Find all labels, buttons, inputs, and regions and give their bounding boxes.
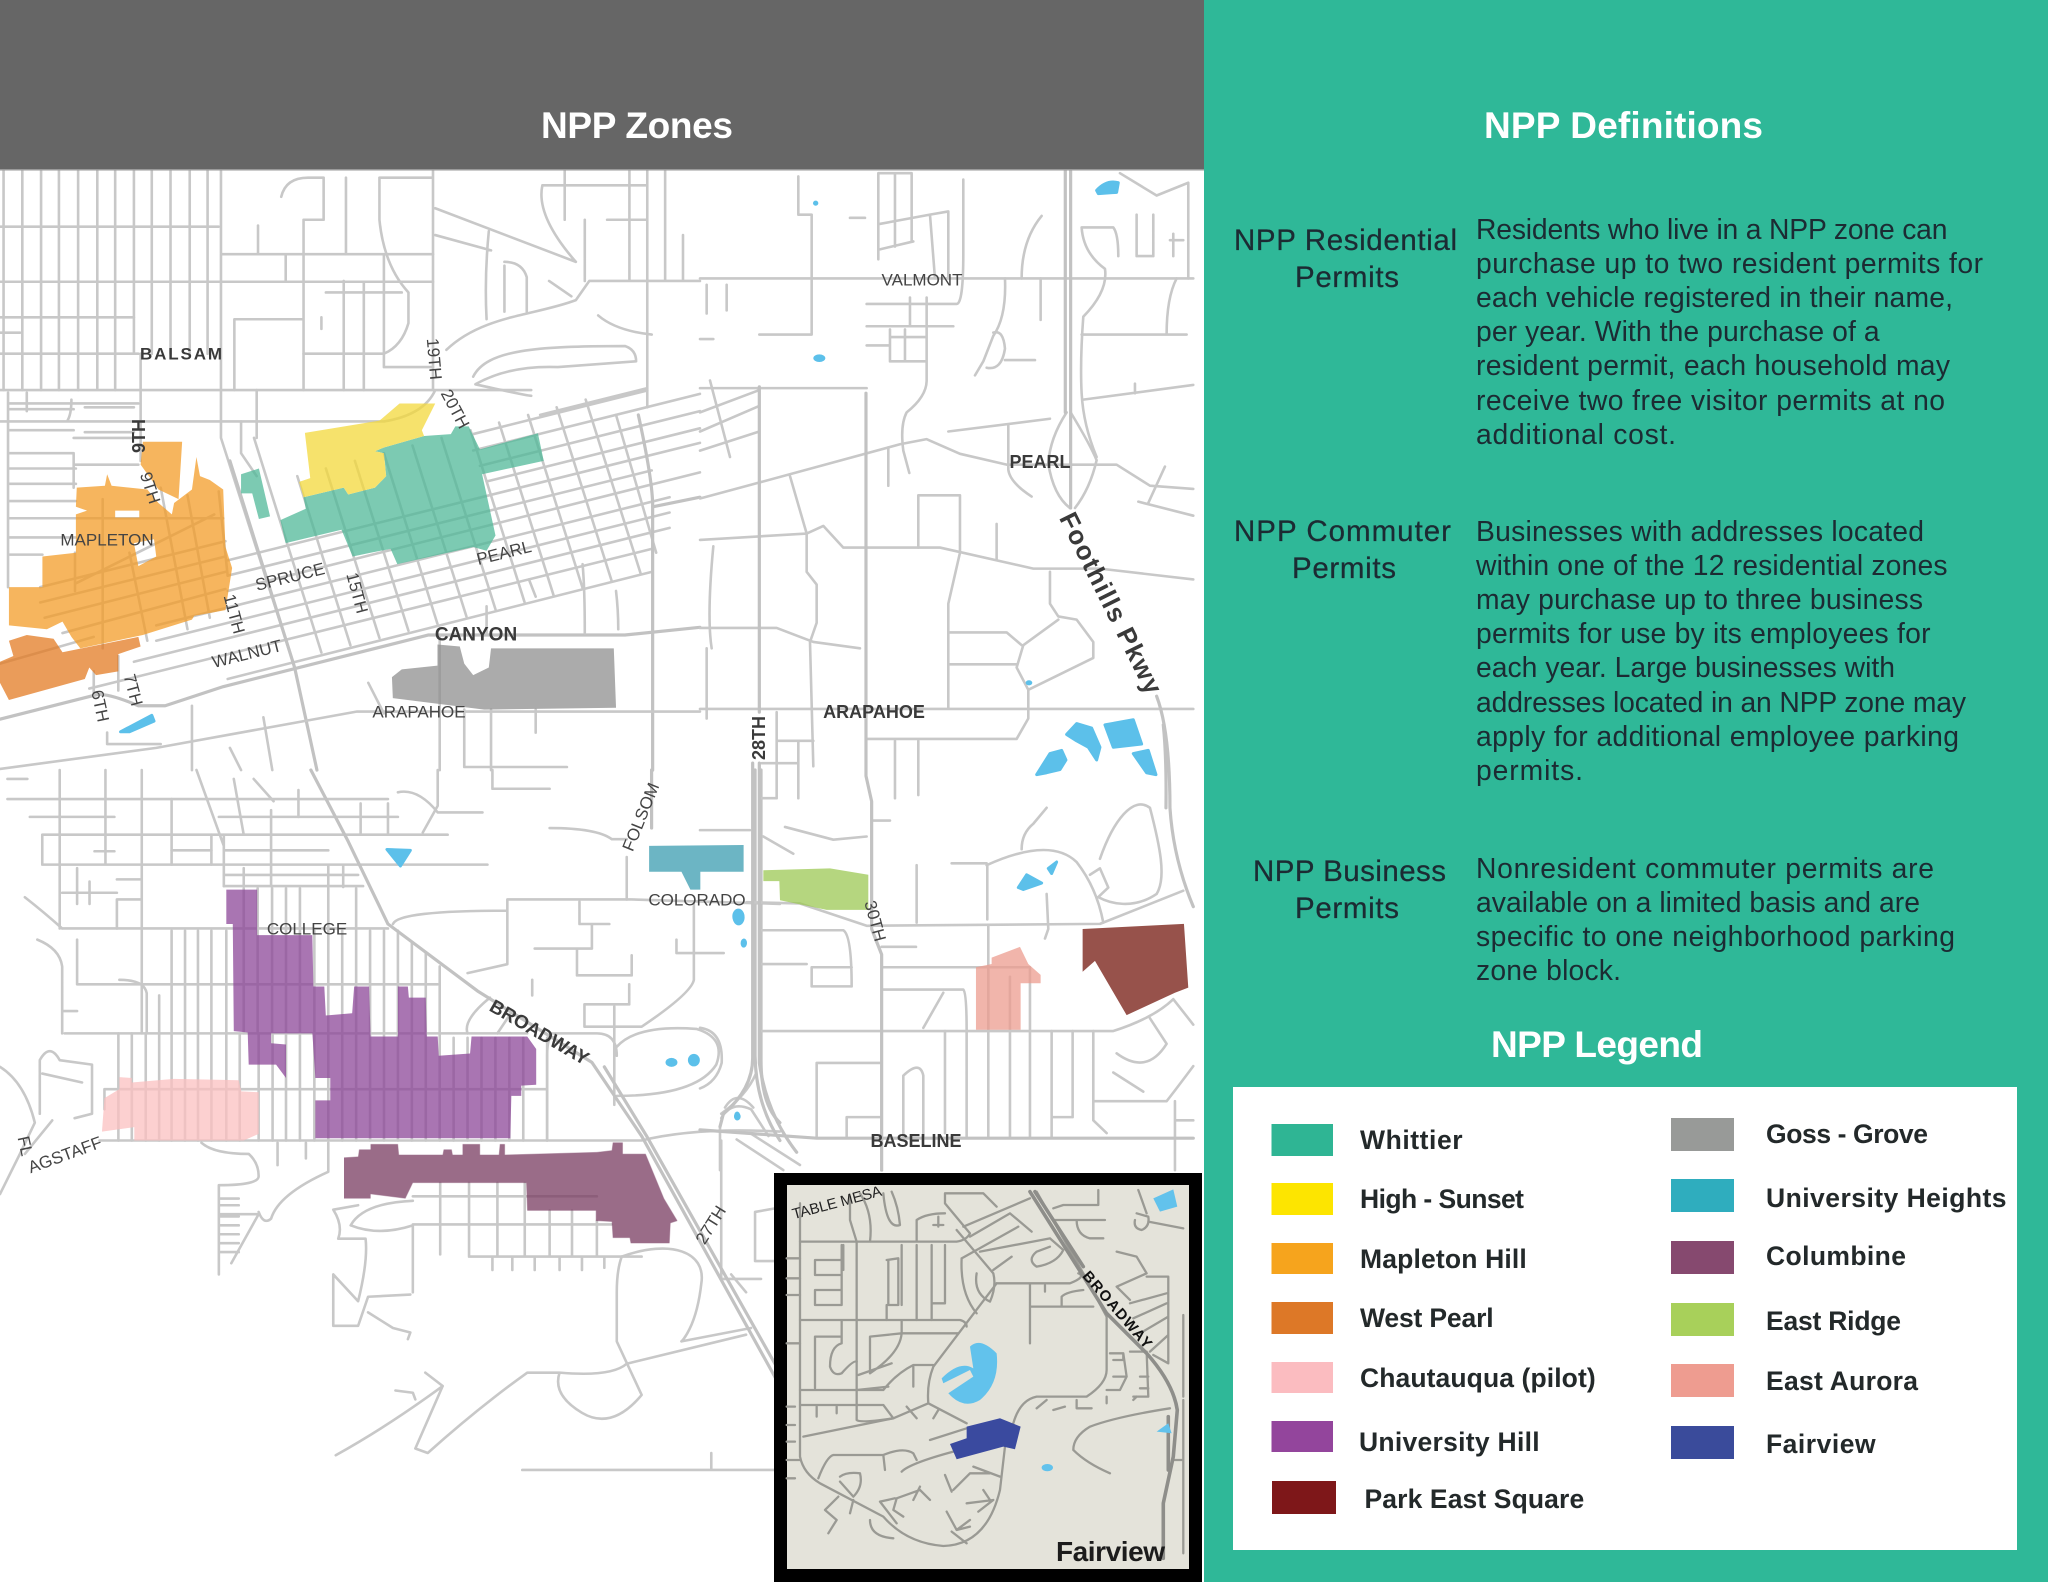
- label: 27th: 27TH: [692, 1202, 730, 1248]
- inset label: Broadway: BROADWAY: [1079, 1268, 1155, 1352]
- label: 7th: 7TH: [120, 672, 146, 708]
- definition: residential: purchase up to two resident permits for: [1476, 247, 1983, 279]
- zone: Whittier: [241, 426, 544, 564]
- label: 9th: 9TH: [136, 470, 164, 506]
- label: 11th: 11TH: [220, 592, 248, 636]
- term: NPP Residential Permits: NPP Residential: [1234, 224, 1457, 257]
- label: 9th bold: 9TH: [129, 419, 149, 453]
- heading: NPP Definitions: NPP Definitions: [1484, 105, 1763, 146]
- label: 6th: 6TH: [87, 688, 113, 724]
- label: Pearl west: PEARL: [475, 537, 533, 569]
- label: Balsam: BALSAM: [140, 344, 222, 364]
- legend: Mapleton Hill: Mapleton Hill: [1360, 1244, 1527, 1274]
- legend: Chautauqua: Chautauqua (pilot): [1360, 1363, 1596, 1393]
- definition: commuter: [1475, 515, 1967, 786]
- definition: commuter: each year. Large businesses with: [1476, 651, 1895, 683]
- zone: Goss-Grove: [392, 645, 616, 710]
- definition: residential: resident permit, each household may: [1476, 349, 1951, 381]
- label: Colorado: COLORADO: [648, 890, 746, 910]
- inset frame: [774, 1173, 1202, 1582]
- label: College: COLLEGE: [267, 920, 347, 938]
- zone: University Hill: [226, 890, 536, 1138]
- label: Foothills Parkway: Foothills Pkwy: [1053, 507, 1169, 699]
- roads: southwest quadrant: [0, 770, 780, 1470]
- legend: High-Sunset: [1272, 1183, 1524, 1215]
- legend: Fairview: Fairview: [1766, 1429, 1876, 1459]
- definition: business: zone block.: [1476, 954, 1621, 986]
- ponds: south: [387, 849, 747, 1120]
- legend: East Aurora: [1671, 1364, 1918, 1397]
- inset ponds: [942, 1189, 1177, 1471]
- label: Flagstaff: AGSTAFF: [26, 1133, 104, 1177]
- zone: Chautauqua: [102, 1077, 259, 1141]
- zone: West Pearl: [0, 635, 141, 700]
- map panel: road network: [0, 170, 1193, 1470]
- legend: Park East Square: Park East Square: [1364, 1484, 1584, 1514]
- inset map: Fairview: [774, 1173, 1202, 1582]
- legend: Columbine: [1671, 1241, 1906, 1274]
- definition: residential: Residents who live in a NPP zone can: [1476, 213, 1948, 245]
- definition: business: specific to one neighborhood parking: [1476, 920, 1955, 952]
- label: 20th: 20TH: [437, 386, 473, 432]
- term: NPP Business Permits: Permits: [1295, 892, 1399, 925]
- label: Mapleton: MAPLETON: [60, 530, 154, 550]
- label: Flagstaff: FL: [14, 1134, 36, 1158]
- definition: commuter: apply for additional employee parking: [1476, 720, 1959, 752]
- legend: Goss-Grove: [1671, 1118, 1928, 1151]
- definition: residential: [1476, 213, 1983, 450]
- legend: East Ridge: [1671, 1303, 1901, 1336]
- zone: Columbine: [344, 1143, 677, 1243]
- panel: definitions and legend: [1204, 0, 2048, 1582]
- map zones: colored parking areas: [0, 403, 1188, 1243]
- label: Broadway: BROADWAY: [486, 996, 593, 1070]
- term: NPP Residential Permits: Permits: [1295, 261, 1399, 294]
- label: Arapahoe west: ARAPAHOE: [372, 702, 466, 722]
- zone: East Ridge: [763, 868, 868, 910]
- definition: residential: per year. With the purchase of a: [1476, 315, 1880, 347]
- term: NPP Commuter Permits: Permits: [1292, 552, 1396, 585]
- legend: West Pearl: [1272, 1302, 1494, 1334]
- legend: Mapleton Hill: [1272, 1243, 1527, 1274]
- legend: East Ridge: East Ridge: [1766, 1306, 1901, 1336]
- label: Walnut: WALNUT: [210, 636, 284, 672]
- zone: Mapleton Hill: [9, 442, 232, 648]
- map street labels: [14, 270, 1169, 1248]
- definition: commuter: may purchase up to three business: [1476, 583, 1923, 615]
- roads: east half: [700, 170, 1193, 1170]
- zone: East Aurora: [976, 947, 1041, 1030]
- legend: Whittier: [1272, 1124, 1463, 1156]
- label: Valmont: VALMONT: [882, 270, 962, 290]
- zone: High-Sunset: [299, 403, 435, 497]
- label: Baseline: BASELINE: [870, 1131, 962, 1151]
- legend: Goss-Grove: Goss - Grove: [1766, 1119, 1928, 1149]
- zone: University Heights: [649, 845, 744, 890]
- term: NPP Business Permits: NPP Business: [1253, 855, 1446, 888]
- legend: University Hill: University Hill: [1359, 1427, 1540, 1457]
- zone: Park East Square: [1083, 924, 1188, 1015]
- roads: northwest quadrant: [0, 170, 700, 770]
- ponds: west: [121, 715, 154, 732]
- label: Pearl east: PEARL: [1009, 452, 1071, 472]
- label: Arapahoe east: ARAPAHOE: [823, 702, 925, 722]
- label: 28th: 28TH: [749, 716, 769, 760]
- definition: residential: each vehicle registered in their name,: [1476, 281, 1953, 313]
- legend: East Aurora: East Aurora: [1766, 1366, 1918, 1396]
- inset roads: [787, 1190, 1183, 1558]
- legend: Fairview: [1671, 1426, 1876, 1459]
- legend: Park East Square: [1272, 1481, 1584, 1514]
- label: Spruce: SPRUCE: [253, 559, 327, 595]
- definition: commuter: permits.: [1476, 754, 1583, 786]
- heading: NPP Zones: NPP Zones: [541, 105, 733, 146]
- term: NPP Business Permits: [1253, 855, 1446, 925]
- definition: business: [1476, 852, 1955, 986]
- legend: University Heights: University Heights: [1766, 1183, 2006, 1213]
- legend: University Heights: [1671, 1179, 2006, 1213]
- definition: commuter: permits for use by its employees for: [1476, 617, 1930, 649]
- definition: commuter: Businesses with addresses located: [1476, 515, 1924, 547]
- header bar: NPP Zones: [0, 0, 1204, 170]
- term: NPP Commuter Permits: NPP Commuter: [1234, 515, 1451, 548]
- inset background: [787, 1185, 1189, 1569]
- definition: commuter: addresses located in an NPP zone may: [1476, 686, 1967, 718]
- legend: University Hill: [1272, 1421, 1540, 1457]
- term: NPP Commuter Permits: [1234, 515, 1451, 585]
- legend: Whittier: Whittier: [1360, 1125, 1463, 1155]
- label: 19th: 19TH: [423, 337, 445, 381]
- term: NPP Residential Permits: [1234, 224, 1457, 294]
- definition: residential: additional cost.: [1476, 418, 1676, 450]
- label: 15th: 15TH: [342, 570, 372, 616]
- ponds: east: [732, 182, 1156, 1120]
- inset label: Table Mesa: TABLE MESA: [790, 1183, 884, 1223]
- legend: Columbine: Columbine: [1766, 1241, 1906, 1271]
- map water bodies: [121, 182, 1156, 1120]
- legend: West Pearl: West Pearl: [1360, 1303, 1494, 1333]
- label: Canyon: CANYON: [435, 624, 517, 646]
- heading: NPP Legend: NPP Legend: [1491, 1024, 1703, 1065]
- definition: business: available on a limited basis and are: [1476, 886, 1920, 918]
- definition: commuter: within one of the 12 residential zones: [1475, 549, 1948, 581]
- definition: business: Nonresident commuter permits are: [1476, 852, 1934, 884]
- legend: High-Sunset: High - Sunset: [1360, 1184, 1524, 1214]
- label: 30th: 30TH: [860, 898, 890, 944]
- inset zone: Fairview polygon: [950, 1418, 1021, 1459]
- label: Folsom: FOLSOM: [619, 780, 663, 854]
- inset label: Fairview: Fairview: [1056, 1536, 1165, 1567]
- legend box: [1233, 1087, 2017, 1550]
- definition: residential: receive two free visitor permits at no: [1476, 384, 1945, 416]
